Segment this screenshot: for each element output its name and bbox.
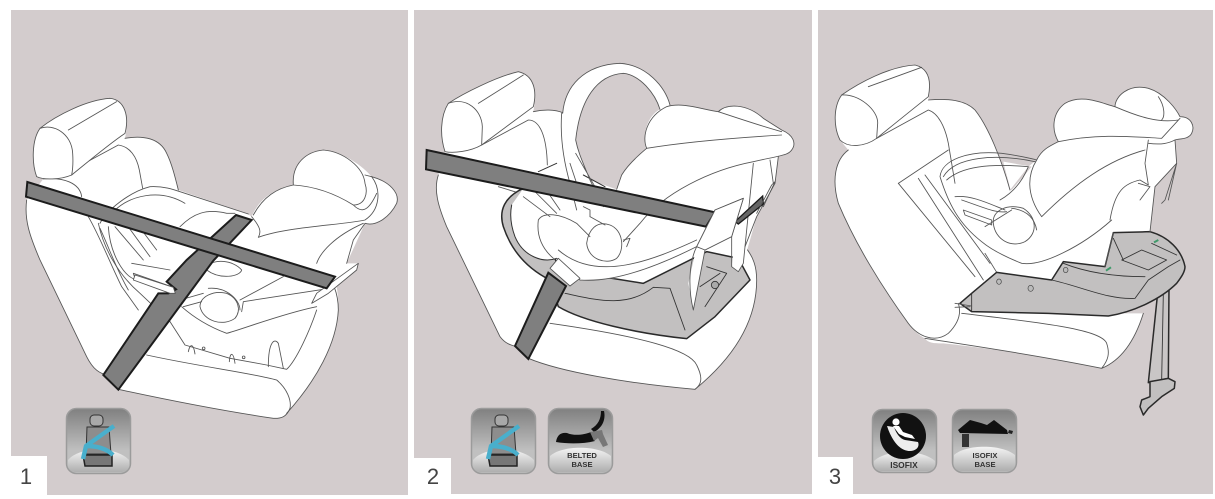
carrier handle <box>561 63 670 210</box>
icon: seat belt <box>66 408 130 474</box>
icon: isofix base <box>952 410 1016 472</box>
panel 1: seat belt installation <box>11 10 408 495</box>
illustration: carrier on isofix base with support leg <box>835 65 1193 415</box>
carrier shell <box>170 310 317 369</box>
belt straps <box>103 215 252 390</box>
belt strap <box>515 273 566 359</box>
icon: isofix base: BASE <box>974 460 996 469</box>
isofix leg <box>1140 287 1175 415</box>
icon: belted base <box>548 408 612 474</box>
illustration: car seat with rear-facing carrier and belt <box>26 98 397 418</box>
panel 2: belted base installation <box>414 10 812 494</box>
icon: seat belt <box>472 408 536 474</box>
carrier body <box>1037 87 1193 267</box>
isofix base <box>960 232 1185 316</box>
icon: belted base: BELTED <box>567 451 597 460</box>
icon: isofix <box>872 410 936 472</box>
number label 2: 2 <box>427 464 439 489</box>
number label 2 <box>414 458 451 494</box>
carrier shell <box>511 148 778 310</box>
illustration: carrier on belted base <box>426 63 794 389</box>
number label 3: 3 <box>829 464 841 489</box>
icon: belted base: BASE <box>571 460 593 469</box>
icon: isofix: ISOFIX <box>890 460 918 470</box>
number label 3 <box>818 457 853 494</box>
icon: isofix base: ISOFIX <box>973 451 997 460</box>
panel 3: isofix base installation <box>818 10 1213 494</box>
belted base <box>502 188 750 339</box>
number label 1 <box>11 456 47 495</box>
number label 1: 1 <box>20 464 32 489</box>
